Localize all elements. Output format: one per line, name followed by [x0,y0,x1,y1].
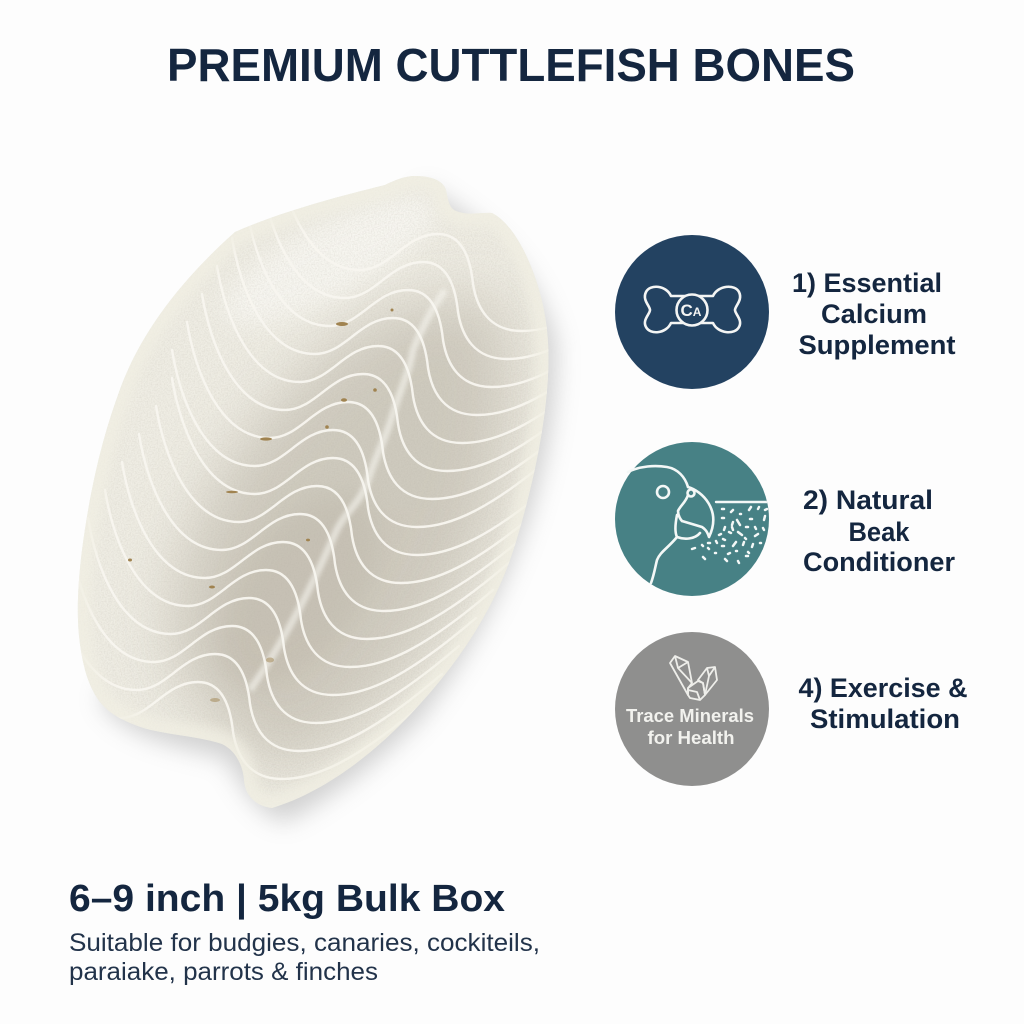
suitability text: paraiake, parrots & finches [69,958,378,986]
label: essential calcium supplement: 1) Essential [792,268,942,298]
label: essential calcium supplement [792,268,956,360]
icon: bone [645,287,740,332]
icon label text [626,705,754,748]
title: PREMIUM CUTTLEFISH BONES [167,39,855,91]
label: natural beak conditioner [803,485,955,577]
icon circle: calcium bone [615,235,769,389]
icon: shelf and particles [692,502,768,563]
icon: crystals [670,656,717,700]
label: essential calcium supplement: Calcium [821,299,927,329]
label: natural beak conditioner: Conditioner [803,547,955,577]
label: essential calcium supplement: Supplement [798,330,956,360]
label: exercise and stimulation: Stimulation [810,704,960,734]
suitability text [69,929,540,986]
central white seam [250,290,445,690]
icon label text: Trace Minerals [626,705,754,726]
label: natural beak conditioner: 2) Natural [803,485,933,515]
brown specks [128,308,394,702]
icon: calcium symbol: CA [681,301,702,320]
pale shell rim [78,176,549,808]
icon circle: parrot beak [615,442,769,596]
cuttlefish bone photo illustration [78,176,566,829]
suitability text: Suitable for budgies, canaries, cockiteils, [69,929,540,957]
shell growth ridges [88,220,542,780]
icon circle: trace minerals [615,632,769,786]
icon: parrot outline [628,466,713,583]
size and pack heading: 6–9 inch | 5kg Bulk Box [69,878,505,920]
label: exercise and stimulation: 4) Exercise & [798,673,968,703]
label: exercise and stimulation [798,673,968,734]
icon: calcium symbol [676,294,708,326]
label: natural beak conditioner: Beak [848,517,910,547]
icon label text: for Health [648,727,734,748]
